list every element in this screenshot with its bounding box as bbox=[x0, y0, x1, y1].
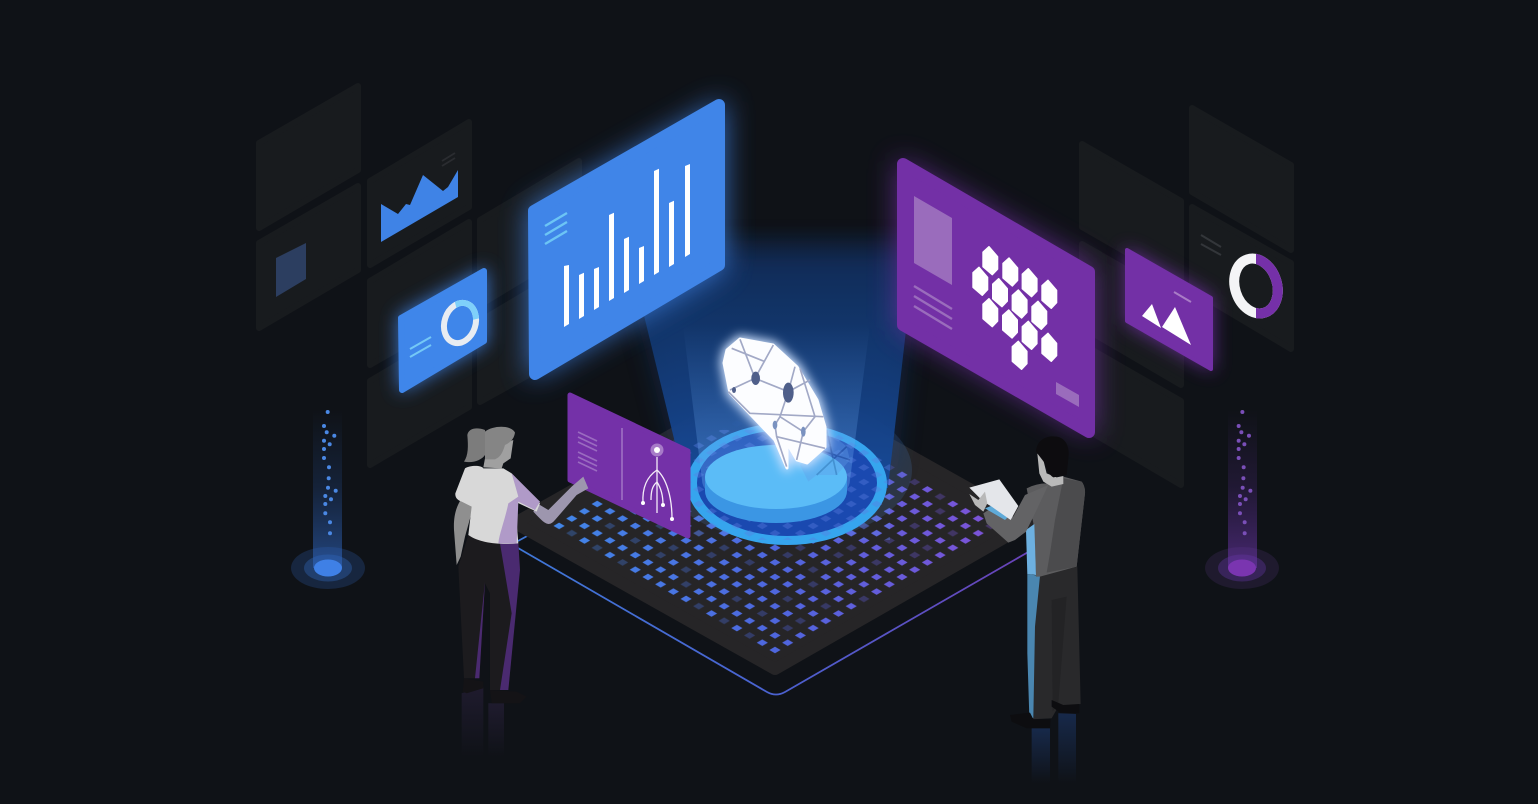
panel: large blue bar chart card bbox=[534, 105, 719, 374]
panel: purple tree diagram screen bbox=[570, 395, 688, 536]
trouser blue stripe bbox=[1027, 574, 1040, 718]
person: man holding paper bbox=[969, 436, 1085, 783]
icon: glowing brain network bbox=[724, 339, 825, 468]
hologram inner light beam bbox=[683, 325, 870, 512]
panel: small blue donut card bbox=[401, 271, 484, 390]
sweater bbox=[1027, 477, 1085, 577]
reflection bbox=[462, 687, 504, 757]
trouser inner shade bbox=[1052, 597, 1067, 712]
hologram beam soft glow bbox=[628, 250, 912, 470]
paper bbox=[969, 479, 1018, 520]
brain glow bbox=[724, 339, 825, 468]
right purple particle tube bbox=[1205, 405, 1279, 589]
left blue particle tube bbox=[291, 405, 365, 589]
shoes bbox=[463, 678, 527, 703]
neck and face bbox=[483, 440, 513, 468]
reflection bbox=[1032, 713, 1076, 783]
chart: white and purple donut on dim tile bbox=[1201, 235, 1285, 319]
hologram floor glow bbox=[662, 398, 912, 542]
icon: tree network bbox=[641, 444, 674, 521]
hair bbox=[485, 427, 515, 459]
illustration: isometric AI platform scene bbox=[256, 84, 1294, 774]
platform dot grid bbox=[554, 465, 992, 654]
platform outline line bbox=[510, 535, 1030, 694]
forearm bbox=[533, 477, 588, 524]
corner tag bbox=[1056, 382, 1079, 407]
hologram ring base bbox=[687, 423, 890, 545]
panel group: dim right dashboard tiles bbox=[1082, 108, 1291, 485]
panel: small purple mountain card bbox=[1127, 250, 1211, 369]
panel group: dim left dashboard tiles bbox=[259, 86, 579, 465]
legend lines bbox=[545, 213, 567, 244]
back arm bbox=[454, 498, 473, 565]
glow: small blue panel bbox=[398, 267, 487, 393]
ponytail bbox=[464, 428, 485, 462]
hologram disk bbox=[705, 445, 847, 523]
trousers bbox=[458, 535, 520, 690]
glow: large purple panel bbox=[897, 158, 1095, 438]
trouser purple stripes bbox=[475, 543, 520, 690]
blue light stripe bbox=[1026, 524, 1036, 575]
panel: large purple hexagon card bbox=[903, 164, 1089, 432]
image placeholder bbox=[914, 196, 952, 285]
text lines bbox=[578, 432, 597, 471]
text lines bbox=[914, 286, 952, 329]
shoes bbox=[1010, 700, 1079, 728]
hologram wide light beam bbox=[622, 225, 918, 488]
hand bbox=[969, 492, 987, 512]
icon: dim square thumbnail bbox=[276, 243, 306, 297]
shirt purple light bbox=[498, 473, 540, 543]
brain reflection bbox=[800, 430, 850, 482]
shirt bbox=[455, 466, 540, 544]
bar chart bbox=[564, 164, 690, 327]
glow: large blue panel bbox=[528, 99, 725, 380]
cuff bbox=[985, 505, 1008, 520]
neck and face bbox=[1037, 453, 1063, 487]
hexagon cluster bbox=[973, 247, 1057, 369]
trousers bbox=[1032, 567, 1081, 719]
arm bbox=[983, 485, 1048, 543]
hair bbox=[1036, 436, 1069, 477]
glow: small purple panel bbox=[1125, 247, 1213, 372]
platform top surface bbox=[515, 378, 1030, 669]
sweater shade bbox=[1047, 478, 1085, 573]
chart: blue area chart on dim tile bbox=[381, 153, 458, 242]
person: woman pointing at screen bbox=[454, 427, 588, 757]
